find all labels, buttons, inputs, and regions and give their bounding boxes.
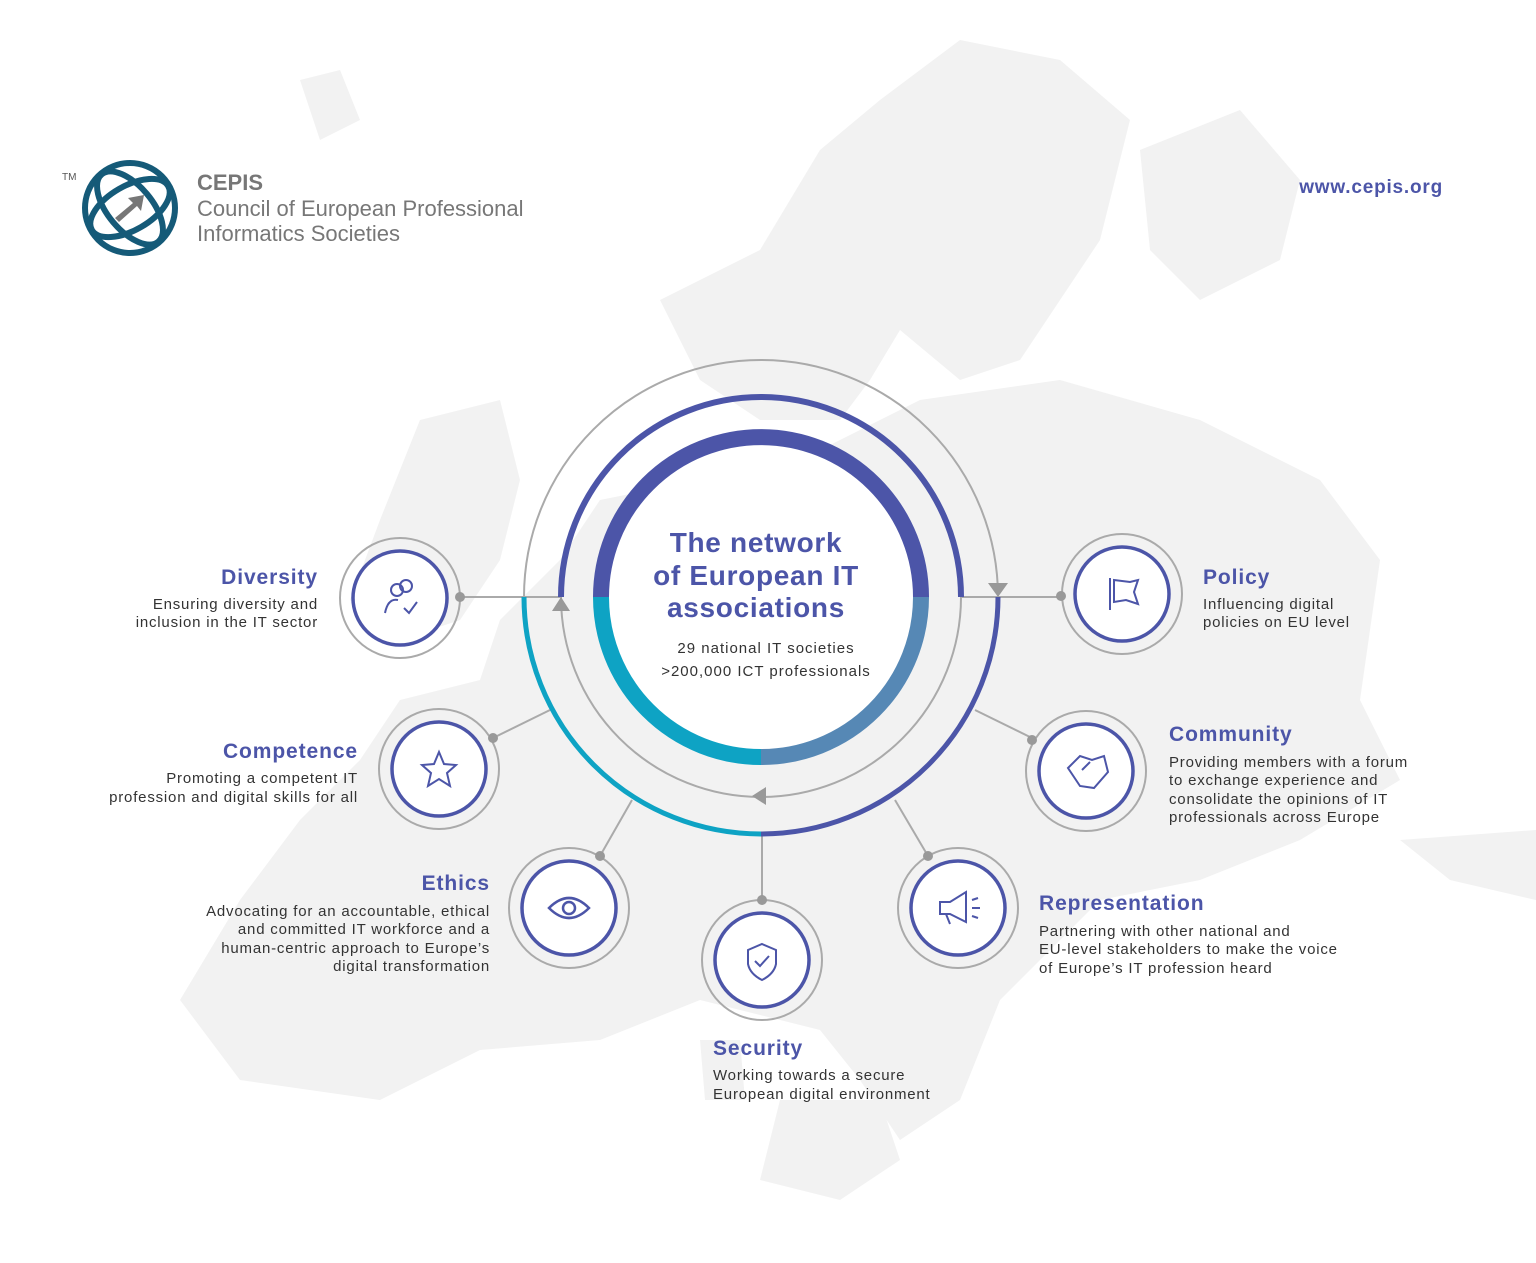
node: Ethics bbox=[206, 848, 629, 975]
node: Diversity: inclusion in the IT sector bbox=[136, 614, 318, 631]
node: Competence: profession and digital skills for all bbox=[109, 789, 358, 806]
central diagram: 29 national IT societies bbox=[677, 640, 855, 657]
node: Competence: Competence bbox=[223, 740, 358, 763]
logo: Informatics Societies bbox=[197, 221, 400, 246]
node: Representation: Partnering with other national and bbox=[1039, 923, 1291, 940]
central diagram: associations bbox=[667, 592, 845, 623]
node: Community: professionals across Europe bbox=[1169, 809, 1380, 826]
logo: Council of European Professional bbox=[197, 196, 524, 221]
node: Representation: of Europe’s IT profession heard bbox=[1039, 960, 1273, 977]
node: Security bbox=[702, 895, 931, 1103]
node: Community: Providing members with a forum bbox=[1169, 754, 1408, 771]
node: Ethics: Ethics bbox=[422, 872, 490, 895]
node: Ethics: and committed IT workforce and a bbox=[238, 921, 490, 938]
node: Policy bbox=[1056, 534, 1350, 654]
node: Community: to exchange experience and bbox=[1169, 772, 1378, 789]
node: Policy: Policy bbox=[1203, 566, 1270, 589]
node: Representation bbox=[898, 848, 1338, 977]
central diagram: of European IT bbox=[653, 560, 859, 591]
central diagram: >200,000 ICT professionals bbox=[661, 663, 871, 680]
node: Security: European digital environment bbox=[713, 1086, 931, 1103]
node: Community: consolidate the opinions of IT bbox=[1169, 791, 1388, 808]
node: Diversity: Ensuring diversity and bbox=[153, 596, 318, 613]
node: Security: Working towards a secure bbox=[713, 1067, 905, 1084]
central diagram: The network bbox=[670, 527, 842, 558]
node: Policy: policies on EU level bbox=[1203, 614, 1350, 631]
connector lines bbox=[460, 597, 1062, 900]
node: Ethics: human-centric approach to Europe’s bbox=[221, 940, 490, 957]
logo: TM bbox=[62, 172, 76, 183]
node: Policy: Influencing digital bbox=[1203, 596, 1334, 613]
node: Ethics: digital transformation bbox=[333, 958, 490, 975]
url: www.cepis.org bbox=[1298, 177, 1443, 198]
node: Competence bbox=[109, 709, 499, 829]
logo bbox=[62, 160, 524, 256]
node: Security: Security bbox=[713, 1037, 803, 1060]
central diagram bbox=[524, 360, 1008, 834]
node: Representation: EU-level stakeholders to make the voice bbox=[1039, 941, 1338, 958]
node: Representation: Representation bbox=[1039, 892, 1204, 915]
node: Community: Community bbox=[1169, 723, 1293, 746]
node: Diversity: Diversity bbox=[221, 566, 318, 589]
logo: CEPIS bbox=[197, 170, 263, 195]
node: Ethics: Advocating for an accountable, ethical bbox=[206, 903, 490, 920]
node: Competence: Promoting a competent IT bbox=[166, 770, 358, 787]
node: Community bbox=[1026, 711, 1408, 831]
node: Diversity bbox=[136, 538, 465, 658]
